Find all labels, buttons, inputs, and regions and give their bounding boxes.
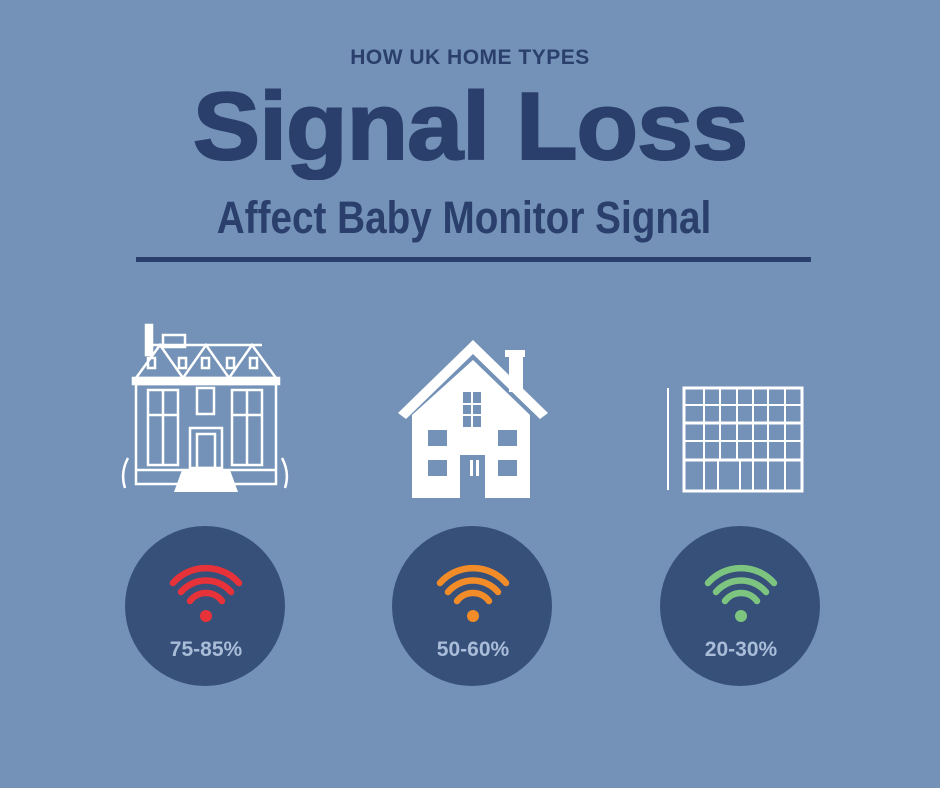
icon: semi-detached house bbox=[398, 340, 548, 498]
badge: 20-30% bbox=[660, 526, 820, 686]
badge: 50-60%: 50-60% bbox=[437, 638, 510, 661]
icon: flat building bbox=[668, 388, 802, 491]
badge: 75-85%: 75-85% bbox=[170, 638, 243, 661]
badge: 20-30%: 20-30% bbox=[705, 638, 778, 661]
subtitle: Affect Baby Monitor Signal bbox=[217, 192, 711, 243]
badge: 75-85% bbox=[125, 526, 285, 686]
main title: Signal Loss bbox=[193, 73, 747, 180]
kicker heading: HOW UK HOME TYPES bbox=[350, 46, 590, 69]
badge: 50-60% bbox=[392, 526, 552, 686]
icon: detached period house bbox=[123, 325, 287, 488]
divider line bbox=[136, 257, 811, 262]
steps bbox=[174, 470, 238, 492]
